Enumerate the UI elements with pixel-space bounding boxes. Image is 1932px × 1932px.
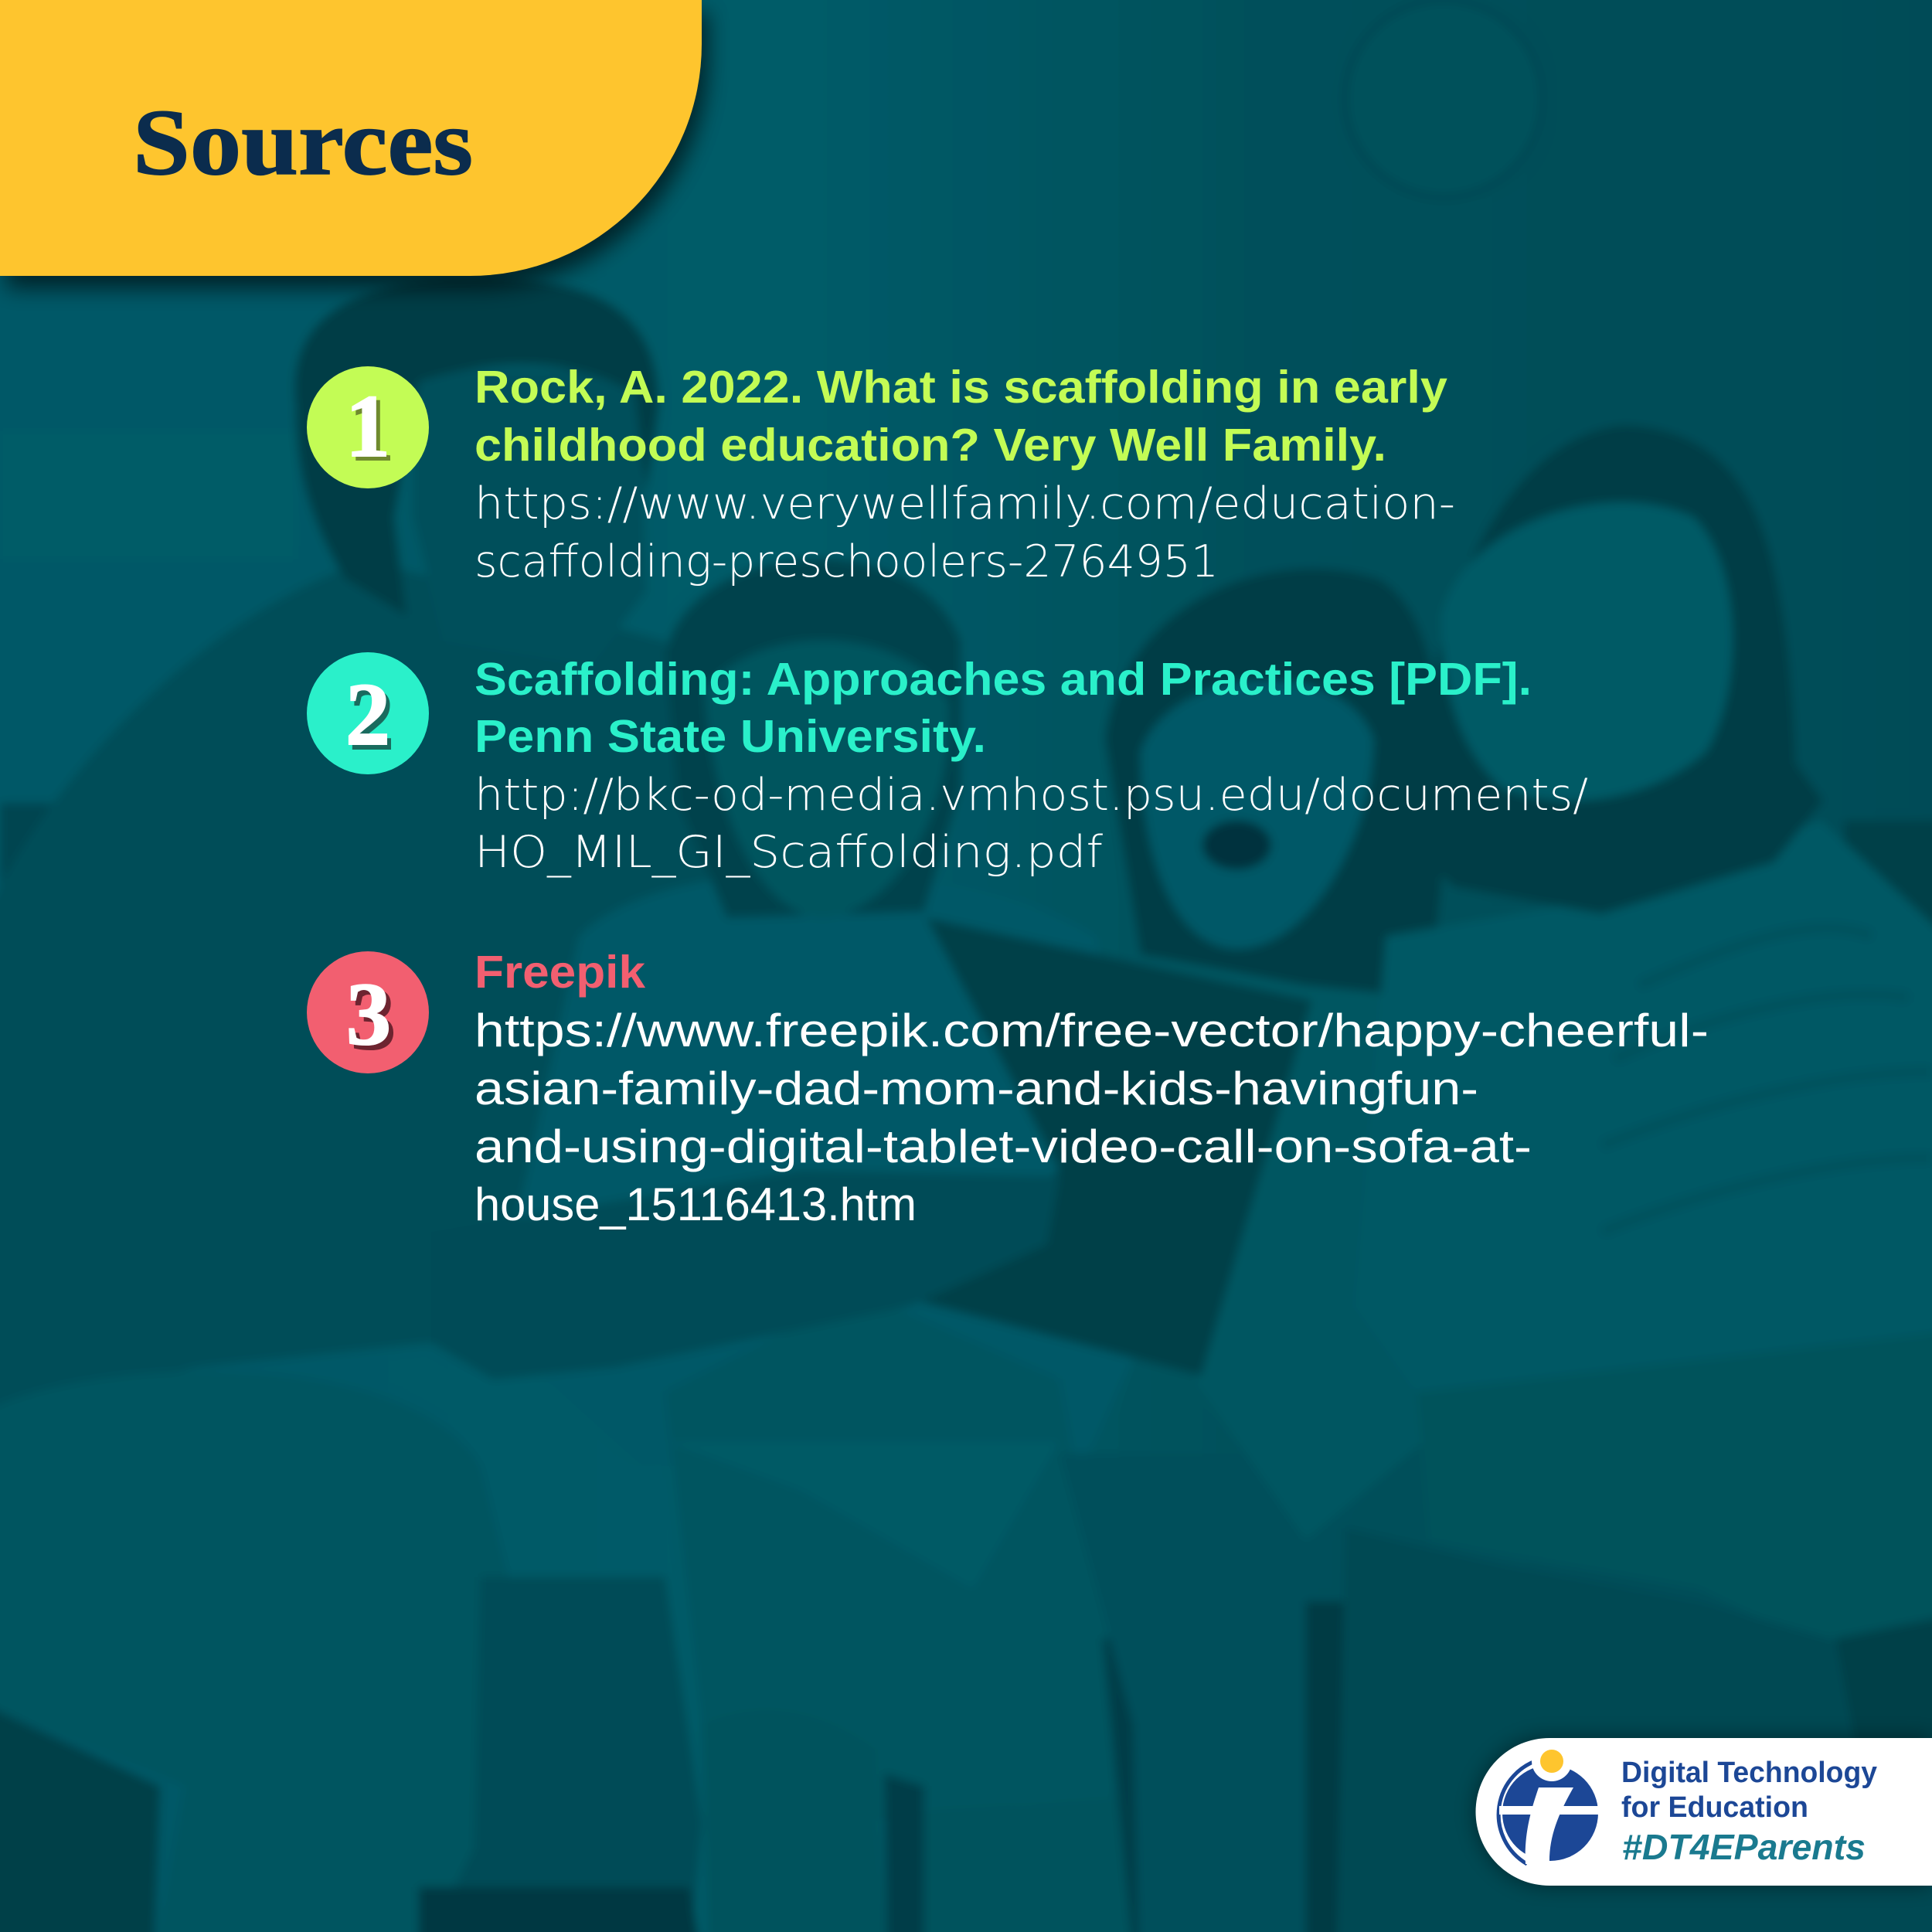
title panel: [0, 0, 708, 288]
source 3 url: [474, 1005, 1709, 1230]
source 3 url: and-using-digital-tablet-video-call-on-sofa-at-: [474, 1121, 1532, 1172]
number badge 1: 1: [349, 381, 394, 480]
logo badge: [1476, 1738, 1932, 1886]
source 2: [307, 652, 1588, 878]
number badge 1: 1: [345, 377, 390, 476]
source 2 title: Penn State University.: [474, 711, 986, 762]
source 1 title: Rock, A. 2022. What is scaffolding in early: [474, 362, 1447, 413]
source 1 title: [474, 362, 1447, 471]
source 3: [307, 947, 1709, 1230]
source 2 url: http://bkc-od-media.vmhost.psu.edu/documents/: [474, 770, 1588, 821]
number badge 3: 3: [346, 965, 391, 1064]
source 2 title: Scaffolding: Approaches and Practices [PDF].: [474, 654, 1532, 705]
logo text: Digital Technology: [1621, 1757, 1877, 1789]
source 3 url: https://www.freepik.com/free-vector/happy-cheerful-: [474, 1005, 1709, 1056]
source 2 url: [474, 770, 1588, 878]
heading: Sources: Sources: [133, 90, 473, 195]
source 1 url: https://www.verywellfamily.com/education-: [474, 478, 1455, 529]
source 2 url: HO_MIL_GI_Scaffolding.pdf: [474, 827, 1103, 878]
number badge 3: [307, 951, 429, 1073]
number badge 3: 3: [351, 970, 396, 1069]
number badge 2: 2: [349, 670, 394, 769]
source 1 url: scaffolding-preschoolers-2764951: [474, 536, 1219, 587]
source 1: [307, 362, 1455, 587]
source 3 url: house_15116413.htm: [474, 1179, 917, 1230]
number badge 1: [307, 366, 429, 488]
icon: DT4E logo: [1498, 1741, 1601, 1864]
source 1 url: [474, 478, 1455, 587]
logo text: for Education: [1621, 1791, 1808, 1824]
source 3 title: Freepik: [474, 947, 645, 998]
number badge 2: 2: [345, 665, 390, 764]
source 1 title: childhood education? Very Well Family.: [474, 420, 1386, 471]
logo text: #DT4EParents: [1622, 1827, 1866, 1867]
logo text: [1621, 1757, 1877, 1867]
source 3 url: asian-family-dad-mom-and-kids-havingfun-: [474, 1063, 1478, 1114]
source 2 title: [474, 654, 1532, 762]
number badge 2: [307, 652, 429, 774]
